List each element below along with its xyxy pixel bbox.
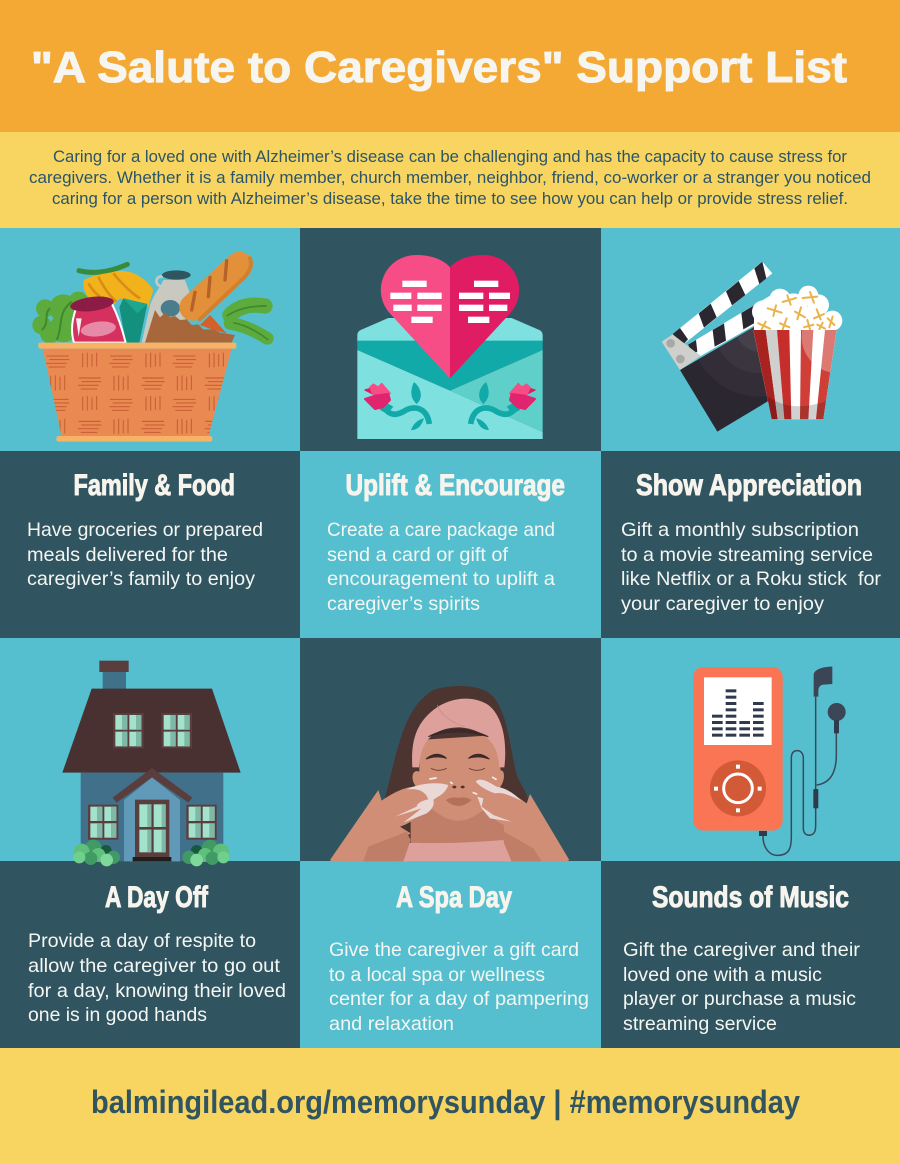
body: a day off: for a day, knowing their loved [28,980,286,1002]
intro band [0,132,900,228]
panel: show appreciation [601,228,900,638]
body: a day off [28,930,286,1026]
body: a spa day: to a local spa or wellness [329,964,545,986]
heading: a day off: A Day Off [105,881,209,914]
body: family and food: caregiver’s family to enjoy [27,568,255,590]
body: sounds of music: player or purchase a music [623,988,856,1010]
body: a spa day [329,939,589,1035]
footer links: balmingilead.org/memorysunday | #memorysunday [91,1084,800,1120]
icon: clapperboard and popcorn [662,262,842,432]
intro text: Caring for a loved one with Alzheimer’s disease can be challenging and has the capacity to cause stress for [53,148,848,166]
panel: family and food [0,228,300,638]
icon: grocery basket [32,258,268,442]
body: sounds of music: loved one with a music [623,964,822,986]
panel: sounds of music [601,638,900,1048]
icon: house [62,661,241,866]
intro text: caregivers. Whether it is a family member, church member, neighbor, friend, co-worker or a stranger you noticed [29,169,871,187]
body: a spa day: center for a day of pampering [329,988,589,1010]
body: sounds of music: Gift the caregiver and their [623,939,861,961]
header band [0,0,900,132]
intro text: caring for a person with Alzheimer’s disease, take the time to see how you can help or provide stress relief. [52,190,848,208]
heading: a spa day: A Spa Day [396,881,512,914]
heading: uplift and encourage: Uplift & Encourage [346,469,565,502]
body: a day off: allow the caregiver to go out [28,955,281,977]
footer band [0,1048,900,1164]
body: uplift and encourage: encouragement to uplift a [327,568,555,590]
heading: sounds of music: Sounds of Music [652,881,849,914]
panel: uplift and encourage [300,228,601,638]
body: show appreciation: like Netflix or a Roku stick for [621,568,882,590]
body: a day off: one is in good hands [28,1004,207,1026]
body: a spa day: and relaxation [329,1013,454,1035]
body: sounds of music [623,939,861,1035]
panel: a spa day [300,638,601,1048]
body: show appreciation: Gift a monthly subscription [621,519,859,541]
body: sounds of music: streaming service [623,1013,777,1035]
body: a day off: Provide a day of respite to [28,930,256,952]
intro text [29,148,871,208]
body: uplift and encourage: send a card or gift of [327,544,509,566]
heading: show appreciation: Show Appreciation [636,469,862,502]
body: show appreciation: your caregiver to enjoy [621,593,824,615]
body: family and food [27,519,263,590]
panel: a day off [0,638,300,1048]
body: family and food: meals delivered for the [27,544,228,566]
body: show appreciation [621,519,882,615]
heading: family and food: Family & Food [74,469,235,502]
icon: woman applying face cream [330,686,569,862]
body: uplift and encourage [327,519,555,615]
icon: music player with earphones [693,667,846,855]
body: family and food: Have groceries or prepared [27,519,263,541]
body: show appreciation: to a movie streaming service [621,544,873,566]
body: uplift and encourage: caregiver’s spirits [327,593,480,615]
body: uplift and encourage: Create a care package and [327,519,555,541]
title: "A Salute to Caregivers" Support List [31,43,847,92]
icon: heart letter in envelope [357,255,543,439]
body: a spa day: Give the caregiver a gift card [329,939,579,961]
